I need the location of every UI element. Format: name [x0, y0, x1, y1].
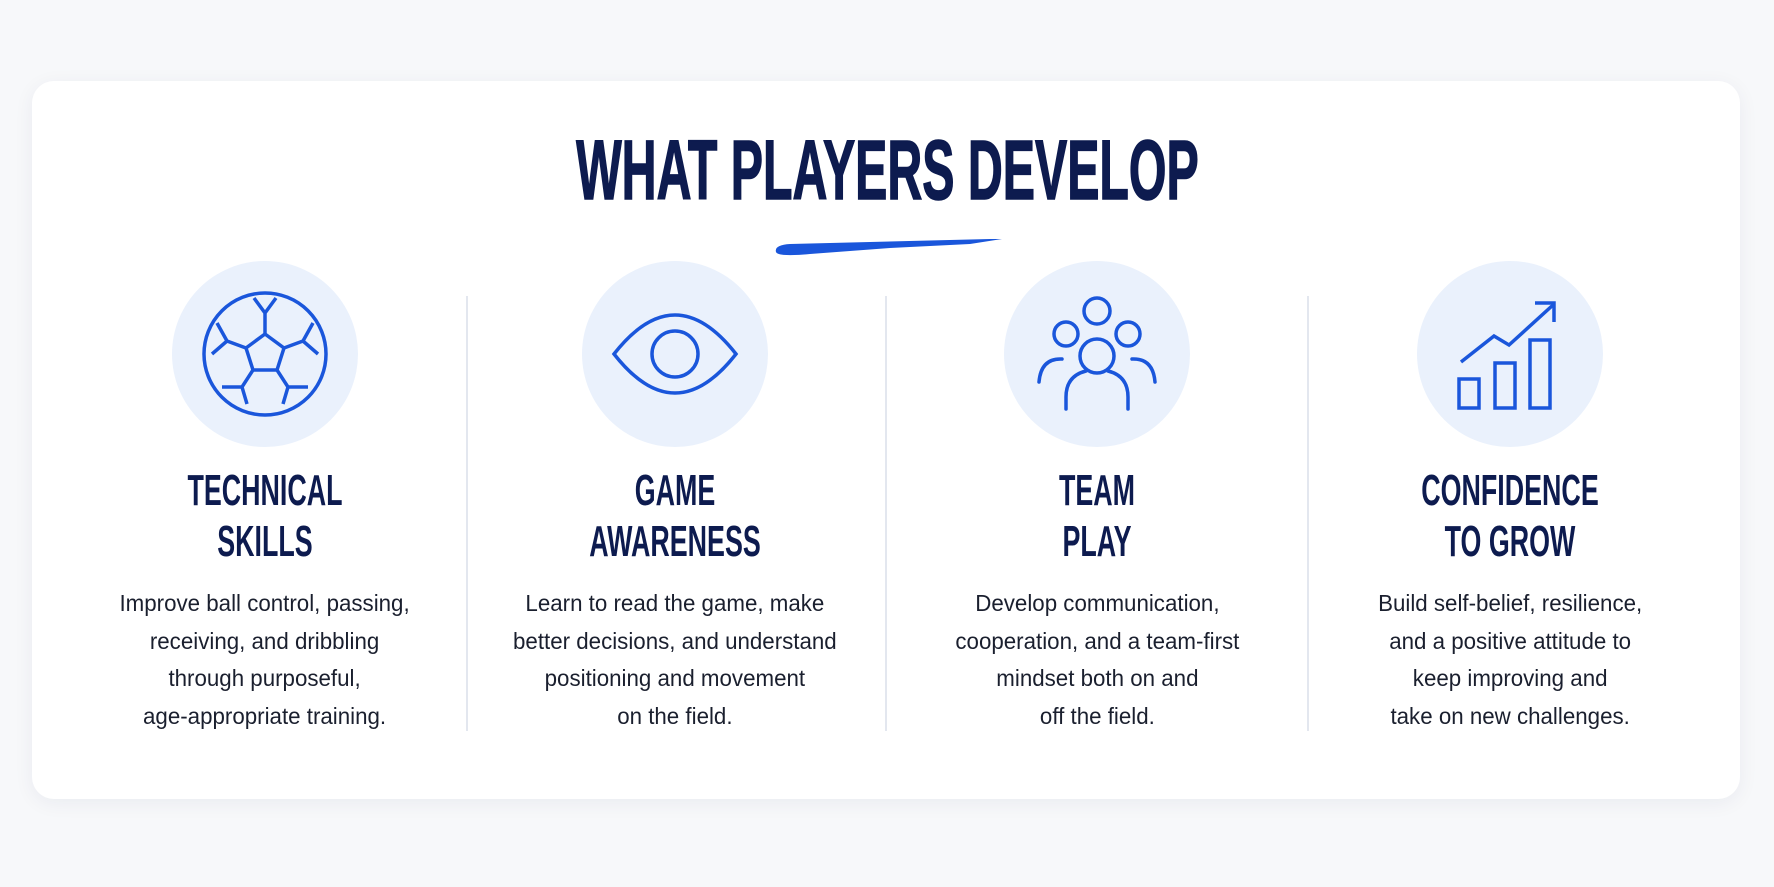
text: Improve ball control, passing,: [120, 590, 410, 616]
heading: SKILLS: [217, 517, 313, 566]
text: receiving, and dribbling: [150, 628, 380, 654]
icon: people: [1004, 261, 1190, 447]
brush underline: [776, 239, 1002, 256]
text: Learn to read the game, make: [526, 590, 824, 616]
text: on the field.: [617, 702, 733, 728]
column: game awareness: [513, 261, 837, 728]
heading: PLAY: [1062, 517, 1132, 566]
heading: GAME: [635, 466, 715, 515]
text: [513, 590, 837, 728]
column: technical skills: [120, 261, 410, 729]
text: Develop communication,: [975, 590, 1219, 616]
heading: TECHNICAL: [187, 466, 343, 515]
heading: [187, 466, 343, 566]
heading: AWARENESS: [589, 517, 761, 566]
text: cooperation, and a team-first: [955, 628, 1239, 654]
column: confidence to grow: [1378, 261, 1642, 729]
text: Build self-belief, resilience,: [1378, 590, 1642, 616]
heading: TEAM: [1059, 466, 1135, 515]
text: [120, 590, 410, 729]
icon: growth chart: [1417, 261, 1603, 447]
text: [955, 590, 1240, 728]
card: [32, 81, 1740, 799]
column: team play: [955, 261, 1240, 728]
heading: TO GROW: [1445, 517, 1575, 566]
text: through purposeful,: [169, 665, 361, 691]
heading: [1421, 466, 1599, 566]
text: keep improving and: [1413, 665, 1607, 691]
text: mindset both on and: [996, 665, 1198, 691]
text: age-appropriate training.: [143, 702, 387, 728]
icon: eye: [582, 261, 768, 447]
title: WHAT PLAYERS DEVELOP: [576, 123, 1198, 217]
text: better decisions, and understand: [513, 628, 837, 654]
text: positioning and movement: [545, 665, 805, 691]
text: and a positive attitude to: [1389, 628, 1631, 654]
heading: [589, 466, 761, 566]
heading: CONFIDENCE: [1421, 466, 1599, 515]
text: off the field.: [1040, 702, 1154, 728]
icon: soccer ball: [172, 261, 358, 447]
heading: [1059, 466, 1135, 566]
text: [1378, 590, 1642, 729]
text: take on new challenges.: [1390, 702, 1630, 728]
